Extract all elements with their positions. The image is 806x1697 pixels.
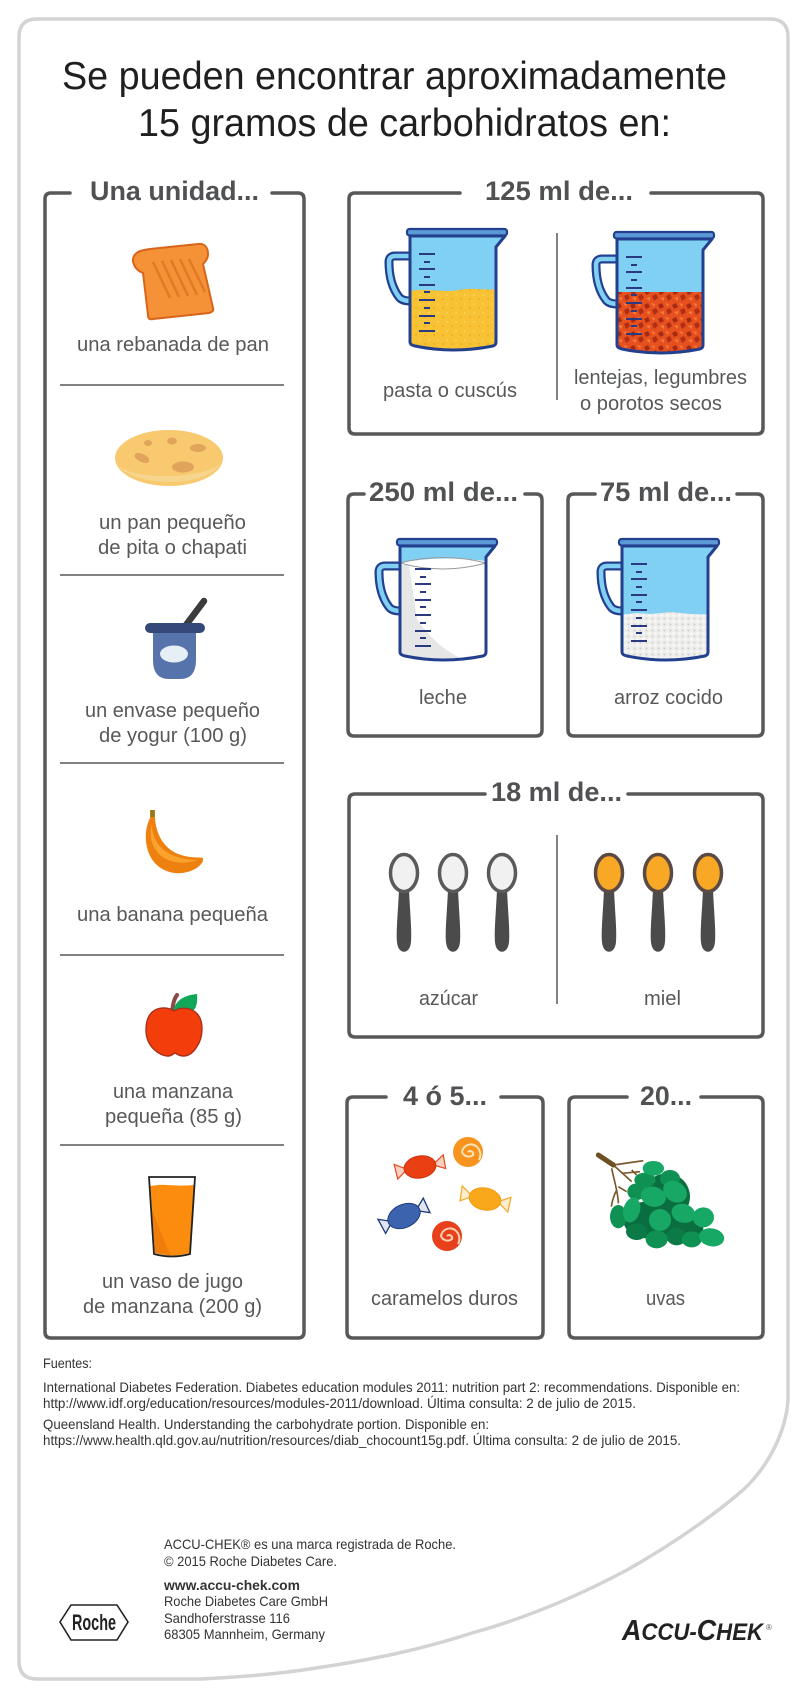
icon: toast — [133, 244, 213, 319]
icon: jug with lentils — [596, 232, 717, 362]
label: banana: una banana pequeña — [77, 903, 269, 926]
label: yogur: de yogur (100 g) — [99, 724, 247, 747]
icon: banana — [146, 810, 203, 873]
label: lentejas — [574, 366, 747, 415]
icon: pita bread — [115, 430, 223, 486]
label: pasta: pasta o cuscús — [383, 379, 517, 402]
sources — [43, 1355, 740, 1448]
icon: apple — [146, 994, 202, 1056]
panel: 4 o 5 — [347, 1081, 543, 1338]
icon: jug with rice — [601, 539, 722, 669]
heading: 4 o 5: 4 ó 5... — [403, 1081, 487, 1111]
label: manzana — [105, 1080, 242, 1128]
panel: una unidad — [45, 176, 304, 1338]
panel: 20 — [569, 1081, 763, 1338]
heading: 20: 20... — [640, 1081, 692, 1111]
sources: https://www.health.qld.gov.au/nutrition/resources/diab_chocount15g.pdf. Última consulta: 2 de julio de 2015. — [43, 1432, 681, 1448]
icon: juice glass — [149, 1177, 195, 1256]
label: manzana: una manzana — [113, 1080, 234, 1103]
panel: 75 ml — [568, 477, 763, 736]
heading: 125 ml: 125 ml de... — [485, 176, 633, 206]
logo: Accu-Chek: ACCU-CHEK — [621, 1615, 765, 1647]
logo: Roche: Roche — [72, 1610, 116, 1635]
label: yogur: un envase pequeño — [85, 699, 260, 722]
icon: honey spoons — [596, 854, 722, 952]
sources: http://www.idf.org/education/resources/modules-2011/download. Última consulta: 2 de julio de 2015. — [43, 1395, 636, 1411]
label: rebanada: una rebanada de pan — [77, 333, 269, 356]
footer address: Roche Diabetes Care GmbH — [164, 1593, 328, 1609]
panel: 250 ml — [348, 477, 542, 736]
footer address: www.accu-chek.com — [163, 1577, 300, 1593]
label: pita: de pita o chapati — [98, 536, 247, 559]
icon: sugar spoons — [390, 854, 516, 952]
title: Se pueden encontrar aproximadamente — [62, 55, 727, 98]
heading: 18 ml: 18 ml de... — [491, 777, 622, 807]
title: 15 gramos de carbohidratos en: — [138, 102, 671, 145]
sources: International Diabetes Federation. Diabetes education modules 2011: nutrition part 2: recommendations. Disponible en: — [43, 1379, 740, 1395]
footer address: © 2015 Roche Diabetes Care. — [164, 1553, 337, 1569]
title — [62, 55, 727, 145]
label: jugo: de manzana (200 g) — [83, 1295, 262, 1318]
panel: 125 ml — [349, 176, 763, 434]
label: pita — [98, 511, 247, 559]
footer address: 68305 Mannheim, Germany — [164, 1626, 325, 1642]
footer address: Sandhoferstrasse 116 — [164, 1610, 290, 1626]
label: miel: miel — [644, 987, 681, 1010]
label: yogur — [85, 699, 260, 747]
label: arroz: arroz cocido — [614, 686, 723, 709]
icon: grapes — [598, 1155, 726, 1248]
label: jugo — [83, 1270, 262, 1318]
label: jugo: un vaso de jugo — [102, 1270, 243, 1293]
label: manzana: pequeña (85 g) — [105, 1105, 242, 1128]
heading: una unidad: Una unidad... — [90, 176, 259, 206]
label: pita: un pan pequeño — [99, 511, 246, 534]
logo: Roche — [60, 1605, 128, 1640]
logo: Accu-Chek: ® — [766, 1623, 772, 1632]
label: lentejas: lentejas, legumbres — [574, 366, 747, 389]
sources: Queensland Health. Understanding the carbohydrate portion. Disponible en: — [43, 1416, 489, 1432]
icon: yogurt — [145, 601, 205, 679]
label: azucar: azúcar — [419, 987, 478, 1010]
label: uvas: uvas — [646, 1287, 685, 1310]
icon: candies — [376, 1137, 512, 1251]
footer address: ACCU-CHEK® es una marca registrada de Roche. — [164, 1536, 456, 1552]
footer address — [163, 1536, 456, 1642]
panel: 18 ml — [349, 777, 763, 1037]
sources: Fuentes: — [43, 1355, 92, 1371]
label: lentejas: o porotos secos — [580, 392, 722, 415]
label: leche: leche — [419, 686, 467, 709]
icon: jug with milk — [379, 539, 499, 669]
label: caramelos: caramelos duros — [371, 1287, 518, 1310]
heading: 250 ml: 250 ml de... — [369, 477, 518, 507]
heading: 75 ml: 75 ml de... — [600, 477, 732, 507]
icon: jug with pasta — [389, 229, 510, 359]
